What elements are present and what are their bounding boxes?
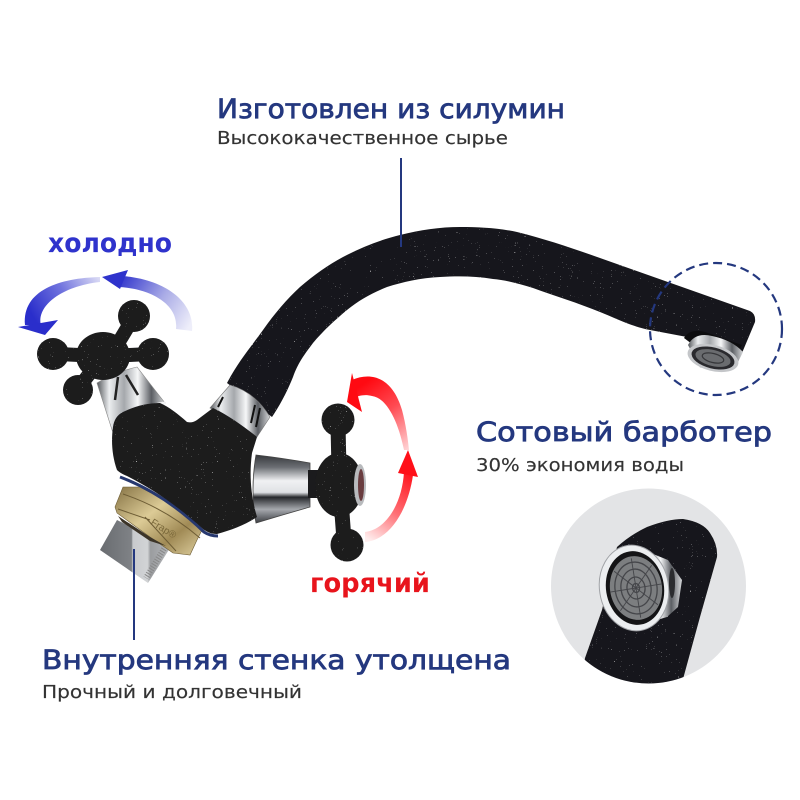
label: cold: холодно bbox=[48, 228, 172, 259]
nozzle aerator bbox=[684, 331, 743, 377]
close-up aerator bbox=[593, 540, 682, 636]
heading block: material bbox=[217, 94, 565, 149]
arrow: hot rotation bbox=[347, 373, 418, 542]
arrow: cold rotation bbox=[18, 270, 192, 335]
brass nut: Frap® bbox=[148, 517, 178, 542]
heading block: inner wall bbox=[42, 645, 511, 703]
faucet illustration bbox=[37, 227, 755, 583]
heading block: material: Изготовлен из силумин bbox=[217, 94, 565, 125]
brass nut bbox=[115, 487, 202, 555]
threaded connector bbox=[100, 520, 170, 583]
callout line: spout bbox=[400, 158, 402, 247]
spout bbox=[227, 227, 755, 417]
left cross handle bbox=[37, 300, 169, 405]
aerator close-up panel bbox=[551, 488, 746, 690]
handle disc bbox=[354, 464, 366, 506]
label: hot: горячий bbox=[310, 568, 430, 599]
heading block: material: Высококачественное сырье bbox=[217, 129, 508, 149]
heading block: aerator: 30% экономия воды bbox=[476, 456, 684, 476]
heading block: inner wall: Внутренняя стенка утолщена bbox=[42, 645, 511, 676]
blue gasket bbox=[120, 477, 218, 536]
heading block: aerator bbox=[476, 417, 772, 476]
right cross handle bbox=[308, 404, 366, 562]
right valve chrome bbox=[253, 455, 310, 523]
close-up spout bbox=[580, 519, 717, 690]
dashed circle around aerator bbox=[650, 263, 782, 395]
heading block: inner wall: Прочный и долговечный bbox=[42, 683, 302, 703]
callout line: connector bbox=[133, 549, 135, 640]
spout collar bbox=[210, 385, 270, 437]
left valve chrome bbox=[97, 367, 165, 433]
heading block: aerator: Сотовый барботер bbox=[476, 417, 772, 448]
faucet body bbox=[112, 403, 257, 534]
